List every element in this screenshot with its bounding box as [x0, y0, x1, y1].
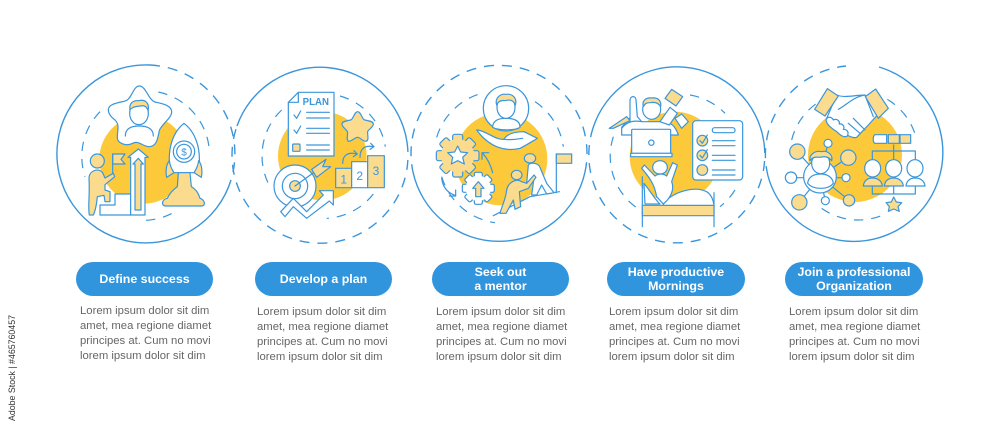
text block: have productive mornings: principes at. Cum no movi — [609, 336, 740, 348]
icon: productive mornings — [609, 89, 743, 227]
text block: have productive mornings: amet, mea regione diamet — [609, 321, 741, 333]
text block: have productive mornings: Lorem ipsum dolor sit dim — [609, 306, 738, 318]
text block: define success: Lorem ipsum dolor sit dim — [80, 305, 209, 317]
text block: develop a plan: amet, mea regione diamet — [257, 321, 389, 333]
pill: have productive mornings: Mornings — [648, 279, 704, 293]
text block: have productive mornings: lorem ipsum dolor sit dim — [609, 351, 735, 363]
icon: develop a plan: PLAN — [303, 97, 329, 108]
column: join a professional organization — [785, 262, 923, 363]
pill: have productive mornings: Have productive — [628, 265, 724, 279]
icon: define success: $ — [181, 147, 187, 158]
pill: join a professional organization: Join a professional — [798, 265, 910, 279]
icon: develop a plan: 3 — [373, 164, 380, 178]
text block: join a professional organization: amet, mea regione diamet — [789, 321, 921, 333]
pill: seek out a mentor — [432, 262, 569, 296]
text block: join a professional organization: Lorem ipsum dolor sit dim — [789, 306, 918, 318]
text block: develop a plan: lorem ipsum dolor sit dim — [257, 351, 383, 363]
icon: seek out a mentor — [436, 86, 572, 223]
text block: seek out a mentor: principes at. Cum no movi — [436, 336, 567, 348]
panel: productive mornings circle — [589, 67, 765, 243]
icon: define success — [82, 86, 209, 220]
pill: develop a plan: Develop a plan — [280, 272, 367, 286]
panel: develop a plan circle — [232, 67, 408, 243]
text block: define success: amet, mea regione diamet — [80, 320, 212, 332]
pill: define success: Define success — [99, 272, 190, 286]
icon: develop a plan: 2 — [356, 169, 363, 183]
pill: have productive mornings — [607, 262, 745, 296]
pill: join a professional organization — [785, 262, 923, 296]
panel: professional organization circle — [765, 66, 943, 241]
icon: professional organization — [785, 89, 925, 220]
text block: define success: principes at. Cum no movi — [80, 335, 211, 347]
pill: seek out a mentor: Seek out — [475, 265, 526, 279]
text block: join a professional organization: lorem ipsum dolor sit dim — [789, 351, 915, 363]
column: seek out a mentor — [432, 262, 569, 363]
text block: join a professional organization: principes at. Cum no movi — [789, 336, 920, 348]
pill: join a professional organization: Organization — [816, 279, 892, 293]
column: develop a plan — [255, 262, 392, 363]
text block: seek out a mentor: Lorem ipsum dolor sit dim — [436, 306, 565, 318]
icon: develop a plan: 1 — [340, 172, 347, 186]
column: define success — [76, 262, 213, 362]
panel: seek out a mentor circle — [411, 65, 587, 241]
text block: develop a plan: principes at. Cum no movi — [257, 336, 388, 348]
icon: develop a plan — [262, 92, 385, 218]
text block: seek out a mentor: amet, mea regione diamet — [436, 321, 568, 333]
text block: develop a plan: Lorem ipsum dolor sit dim — [257, 306, 386, 318]
stock id caption: Adobe Stock | #465760457 — [7, 315, 17, 421]
text block: seek out a mentor: lorem ipsum dolor sit dim — [436, 351, 562, 363]
column: have productive mornings — [607, 262, 745, 363]
panel: define success circle — [57, 65, 235, 243]
text block: define success: lorem ipsum dolor sit dim — [80, 350, 206, 362]
pill: seek out a mentor: a mentor — [474, 279, 527, 293]
